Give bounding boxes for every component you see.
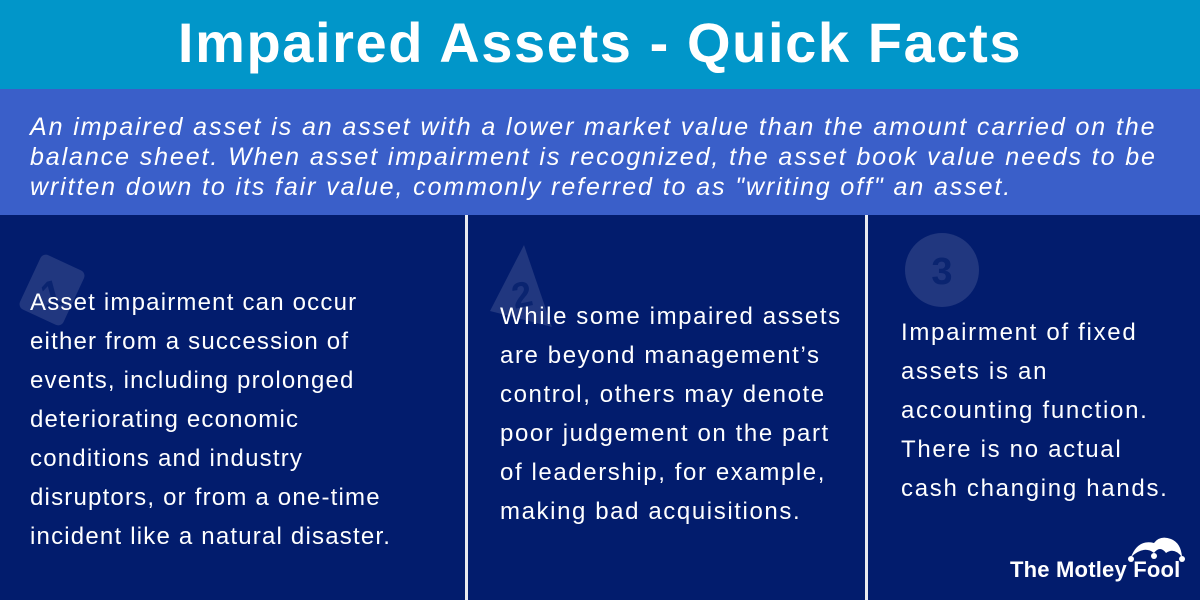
- panel 2 text: [500, 303, 842, 525]
- panel 2 text: control, others may denote: [500, 381, 826, 408]
- header band: [0, 0, 1200, 89]
- panel 3 text: Impairment of fixed: [901, 319, 1137, 346]
- logo: The Motley Fool: [1010, 538, 1185, 582]
- title: Impaired Assets - Quick Facts: [178, 11, 1022, 74]
- panel 3 text: assets is an: [901, 358, 1048, 385]
- icon: number 2 triangle: [490, 246, 552, 327]
- panel 3 text: accounting function.: [901, 397, 1148, 424]
- panel 1 text: [30, 289, 391, 550]
- panel 1 text: disruptors, or from a one-time: [30, 484, 381, 511]
- panel 3 text: There is no actual: [901, 436, 1122, 463]
- panel 2 text: While some impaired assets: [500, 303, 842, 330]
- panel 3 text: cash changing hands.: [901, 475, 1169, 502]
- panel 1: [20, 254, 391, 550]
- panel 1 text: Asset impairment can occur: [30, 289, 357, 316]
- icon: number 3 circle: 3: [931, 251, 953, 293]
- icon: number 3 circle: [905, 233, 979, 307]
- intro text: balance sheet. When asset impairment is recognized, the asset book value needs to be: [30, 143, 1157, 171]
- logo: The Motley Fool: The Motley Fool: [1010, 557, 1180, 582]
- panel 2: [490, 246, 842, 525]
- icon: number 1 diamond: [20, 254, 84, 326]
- icon: jester hat: [1128, 538, 1185, 562]
- panel 3 text: [901, 319, 1169, 502]
- panel 2 text: making bad acquisitions.: [500, 498, 801, 525]
- panel 3: [901, 233, 1169, 502]
- intro band: [0, 89, 1200, 215]
- panel 1 text: either from a succession of: [30, 328, 349, 355]
- panel 2 text: are beyond management’s: [500, 342, 821, 369]
- panel 2 text: poor judgement on the part: [500, 420, 830, 447]
- intro text: written down to its fair value, commonly referred to as "writing off" an asset.: [30, 173, 1012, 201]
- panel 2 text: of leadership, for example,: [500, 459, 826, 486]
- panel 1 text: conditions and industry: [30, 445, 303, 472]
- panel 1 text: incident like a natural disaster.: [30, 523, 391, 550]
- panel 1 text: deteriorating economic: [30, 406, 299, 433]
- icon: number 2 triangle: 2: [508, 272, 536, 317]
- intro text: An impaired asset is an asset with a lower market value than the amount carried on the: [30, 113, 1156, 141]
- intro text: [28, 113, 1157, 201]
- panel 1 text: events, including prolonged: [30, 367, 355, 394]
- icon: number 1 diamond: 1: [36, 272, 68, 318]
